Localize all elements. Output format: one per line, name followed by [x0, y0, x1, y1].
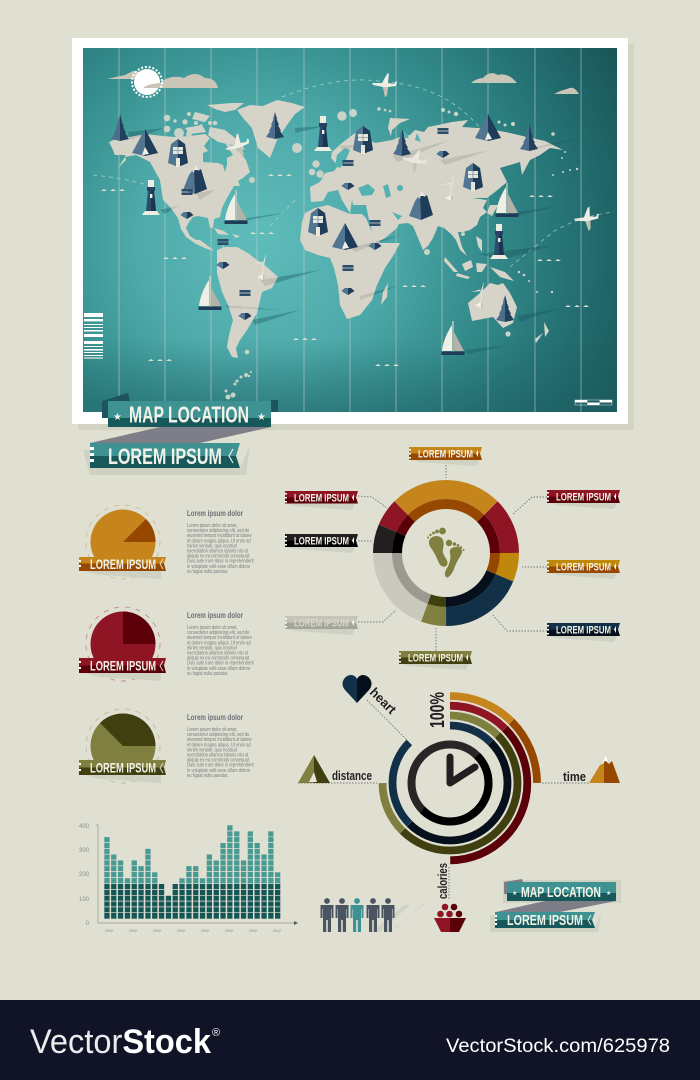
- ocean dots: [164, 107, 578, 400]
- person 2: [336, 898, 348, 932]
- ribbon: [409, 447, 482, 454]
- icons: planes: [222, 73, 601, 233]
- stars: ★: [512, 890, 517, 897]
- notches and chevron: [547, 562, 616, 572]
- paragraph: minim veniam, quis nostrud: [187, 543, 237, 548]
- label text: LOREM IPSUM: [556, 624, 611, 636]
- chevron: [588, 915, 591, 925]
- pie slice: [123, 519, 156, 542]
- people pictogram: [320, 898, 425, 932]
- icon: heart: [343, 675, 371, 703]
- land: continents: [109, 100, 563, 358]
- paragraph: et dolore magna aliqua. Ut enim ad: [187, 538, 251, 543]
- notches and chevron: [399, 653, 468, 662]
- paragraph: eu fugiat nulla pariatur.: [187, 569, 228, 574]
- label: heart: heart: [367, 685, 400, 717]
- notches and chevron: [409, 449, 478, 458]
- inner ring segments: [377, 484, 515, 622]
- label: 100%: 100%: [427, 692, 449, 728]
- white frame: [72, 38, 628, 424]
- icons: wind turbines: [253, 174, 487, 308]
- notches and chevron: [285, 536, 354, 546]
- x labels: 2000: [105, 929, 113, 933]
- person 3 highlighted: [350, 898, 364, 932]
- paragraph: Duis aute irure dolor in reprehenderit: [187, 762, 254, 768]
- heading: Lorem ipsum dolor: [187, 713, 243, 722]
- person shadows: [372, 904, 425, 932]
- time connector: [542, 782, 589, 784]
- person 4: [366, 898, 380, 932]
- shadow: [550, 636, 617, 642]
- text block 3: [187, 713, 254, 778]
- banner: map location: ★: [257, 412, 266, 423]
- barcode: [84, 313, 103, 358]
- footer background: [0, 1000, 700, 1080]
- notches and chevron: [285, 618, 354, 628]
- paragraph: exercitation ullamco laboris nisi ut: [187, 548, 249, 554]
- clock: [396, 729, 504, 837]
- dashed ring: [86, 709, 160, 783]
- label text: LOREM IPSUM: [556, 562, 611, 574]
- ribbon: [495, 912, 595, 920]
- label: time: time: [563, 769, 586, 784]
- banner: [79, 557, 166, 564]
- pie card: gold: [79, 505, 166, 579]
- dashed ring: [86, 607, 160, 681]
- x labels: 2000: [129, 929, 137, 933]
- y labels: 0: [86, 921, 90, 927]
- paragraph: in voluptate velit esse cillum dolore: [187, 767, 251, 773]
- shadow: [288, 504, 355, 510]
- ribbon notches: [90, 447, 94, 462]
- text: MAP LOCATION: [521, 884, 601, 901]
- banner shadow: [84, 571, 161, 579]
- paragraph: in voluptate velit esse cillum dolore: [187, 563, 251, 569]
- heading: Lorem ipsum dolor: [187, 509, 243, 518]
- small banner: map location: ★: [606, 890, 611, 897]
- scale bar: [575, 400, 612, 405]
- pie: [90, 612, 156, 676]
- label text: LOREM IPSUM: [418, 448, 473, 460]
- shadow: [288, 629, 355, 635]
- pie: [90, 714, 156, 778]
- paragraph: Lorem ipsum dolor sit amet,: [187, 727, 237, 732]
- banner shadow: [84, 775, 161, 783]
- label text: LOREM IPSUM: [294, 618, 349, 630]
- heading: Lorem ipsum dolor: [187, 611, 243, 620]
- y labels: 200: [79, 872, 90, 878]
- ribbon: [90, 443, 240, 456]
- icons: mountains: [183, 164, 433, 220]
- back fold: [504, 879, 523, 894]
- x labels: 2000: [249, 929, 257, 933]
- notches: [495, 915, 497, 925]
- banner text: MAP LOCATION: [129, 402, 249, 428]
- banner: map location: [83, 393, 278, 475]
- banner text: LOREM IPSUM: [108, 444, 222, 469]
- notches and chevron: [547, 492, 616, 502]
- label: red left: [285, 491, 358, 510]
- banner label: LOREM IPSUM: [90, 557, 156, 572]
- calories connector: [448, 867, 450, 899]
- distance connector: [298, 782, 377, 784]
- banner label: LOREM IPSUM: [90, 760, 156, 776]
- icons: lighthouses: [142, 116, 508, 259]
- pie slice: [123, 612, 156, 644]
- text: LOREM IPSUM: [507, 912, 583, 929]
- notches and chevron: [547, 625, 616, 634]
- label text: LOREM IPSUM: [556, 492, 611, 504]
- navy arc: [369, 702, 531, 864]
- image id: VectorStock.com/625978: [446, 1036, 670, 1057]
- notches and chevron: [285, 493, 354, 502]
- logo: VectorStock: [30, 1023, 211, 1061]
- ribbon: [285, 534, 358, 540]
- paragraph: aliquip ex ea commodo consequat.: [187, 757, 250, 763]
- small banner: map location: [490, 879, 621, 932]
- notches: [79, 661, 81, 669]
- ribbon: [285, 616, 358, 622]
- registered mark: ®: [212, 1027, 220, 1039]
- gold arc: [327, 660, 573, 906]
- chevron: [160, 763, 163, 773]
- label: black left: [285, 534, 358, 553]
- icon: mountain: [589, 755, 620, 783]
- icon: berry bowl: [434, 904, 466, 932]
- label: gray left: [285, 616, 358, 635]
- pie: [90, 510, 156, 574]
- ribbon front: [108, 401, 271, 418]
- text block 2: [187, 611, 254, 676]
- heart connector: [367, 700, 407, 740]
- paragraph: minim veniam, quis nostrud: [187, 645, 237, 650]
- y labels: 300: [79, 848, 90, 854]
- x labels: 2000: [225, 929, 233, 933]
- label text: LOREM IPSUM: [408, 652, 463, 664]
- ribbon: [547, 623, 620, 630]
- clouds: [107, 71, 579, 94]
- ribbon: [547, 490, 620, 496]
- banner: [79, 760, 166, 768]
- banner: [79, 658, 166, 666]
- ribbon: [399, 651, 472, 658]
- paragraph: consectetur adipisicing elit, sed do: [187, 528, 250, 533]
- text block 1: [187, 509, 254, 574]
- paragraph: Duis aute irure dolor in reprehenderit: [187, 558, 254, 564]
- person 1: [320, 898, 334, 932]
- fold: [496, 901, 616, 912]
- flight paths: [93, 80, 612, 267]
- chevron: [160, 559, 163, 569]
- label: navy right: [547, 623, 620, 642]
- radial progress chart: [327, 660, 573, 906]
- sun: [132, 67, 162, 97]
- label: gold top: [409, 447, 482, 466]
- x labels: 2012: [273, 929, 281, 933]
- paragraph: consectetur adipisicing elit, sed do: [187, 732, 250, 737]
- person 5: [382, 898, 394, 932]
- paragraph: eiusmod tempor incididunt ut labore: [187, 635, 252, 640]
- banner label: LOREM IPSUM: [90, 658, 156, 674]
- stars: ★: [113, 412, 122, 423]
- paragraph: eu fugiat nulla pariatur.: [187, 671, 228, 676]
- icons: location flags: [180, 128, 450, 320]
- notches: [79, 560, 81, 567]
- label: olive bottom: [399, 651, 472, 670]
- shadow: [288, 547, 355, 553]
- frame shadow: [78, 44, 634, 430]
- pie card: red: [79, 607, 166, 681]
- y labels: 100: [79, 897, 90, 903]
- dashed ring: [86, 505, 160, 579]
- chevron: [229, 449, 233, 463]
- icons: waves: [101, 174, 589, 366]
- ribbon back folds: [102, 393, 278, 418]
- bar chart: [79, 824, 298, 933]
- banner: lorem ipsum: [90, 443, 240, 469]
- leader lines: [358, 462, 547, 651]
- paragraph: eiusmod tempor incididunt ut labore: [187, 533, 252, 538]
- lower bars: [104, 884, 280, 919]
- paragraph: eu fugiat nulla pariatur.: [187, 773, 228, 778]
- upper bars: [104, 825, 280, 884]
- icons: sailboats: [198, 183, 518, 355]
- cell separators: [104, 831, 281, 913]
- icons: huts: [168, 126, 483, 236]
- icons: trees: [111, 112, 538, 322]
- x labels: 2000: [153, 929, 161, 933]
- sea shadows: [128, 126, 585, 354]
- red arc: [341, 674, 559, 892]
- label: calories: calories: [435, 863, 450, 899]
- icon: tent: [298, 755, 330, 783]
- y labels: [79, 824, 90, 927]
- paragraph: Lorem ipsum dolor sit amet,: [187, 625, 237, 630]
- shadow: [402, 664, 469, 670]
- paragraph: et dolore magna aliqua. Ut enim ad: [187, 640, 251, 645]
- inland seas: [335, 131, 421, 220]
- banner shadow: [84, 673, 161, 681]
- ribbon: [507, 882, 616, 893]
- label: distance: distance: [332, 768, 372, 783]
- axes: [96, 825, 294, 923]
- pie card: olive: [79, 709, 166, 783]
- shadow: [412, 460, 479, 466]
- paragraph: eiusmod tempor incididunt ut labore: [187, 737, 252, 742]
- paragraph: aliquip ex ea commodo consequat.: [187, 553, 250, 559]
- paragraph: in voluptate velit esse cillum dolore: [187, 665, 251, 671]
- notches: [79, 763, 81, 771]
- icons: tents: [132, 114, 501, 250]
- olive arc: [355, 688, 545, 878]
- axis arrow: [294, 921, 298, 925]
- banner shadow: [83, 424, 278, 475]
- donut chart: [356, 463, 536, 643]
- paragraph: consectetur adipisicing elit, sed do: [187, 630, 250, 635]
- shadow: [550, 573, 617, 579]
- ribbon: [285, 491, 358, 498]
- label text: LOREM IPSUM: [294, 492, 349, 504]
- meridian lines: [119, 48, 581, 412]
- label: red right: [547, 490, 620, 509]
- ribbon fold: [90, 427, 271, 443]
- shadow: [490, 880, 621, 932]
- paragraph: et dolore magna aliqua. Ut enim ad: [187, 742, 251, 747]
- small banner: lorem ipsum: [495, 912, 595, 929]
- label: gold right: [547, 560, 620, 579]
- ribbon: [547, 560, 620, 566]
- footer bar: [0, 1000, 700, 1080]
- label text: LOREM IPSUM: [294, 536, 349, 548]
- pie slice: [100, 713, 156, 746]
- x labels: [105, 929, 281, 933]
- map sea: [83, 48, 617, 412]
- paragraph: Lorem ipsum dolor sit amet,: [187, 523, 237, 528]
- paragraph: exercitation ullamco laboris nisi ut: [187, 650, 249, 656]
- sea darkening: [83, 48, 617, 412]
- x labels: 2000: [177, 929, 185, 933]
- paragraph: aliquip ex ea commodo consequat.: [187, 655, 250, 661]
- panel: world map: [72, 38, 634, 430]
- y labels: 400: [79, 824, 90, 830]
- icon: footprints: [427, 528, 464, 577]
- land shadows: [130, 135, 552, 320]
- paragraph: Duis aute irure dolor in reprehenderit: [187, 660, 254, 666]
- outer ring segments: [356, 463, 536, 643]
- chevron: [160, 661, 163, 671]
- paragraph: exercitation ullamco laboris nisi ut: [187, 752, 249, 758]
- paragraph: minim veniam, quis nostrud: [187, 747, 237, 752]
- shadow: [550, 503, 617, 509]
- x labels: 2000: [201, 929, 209, 933]
